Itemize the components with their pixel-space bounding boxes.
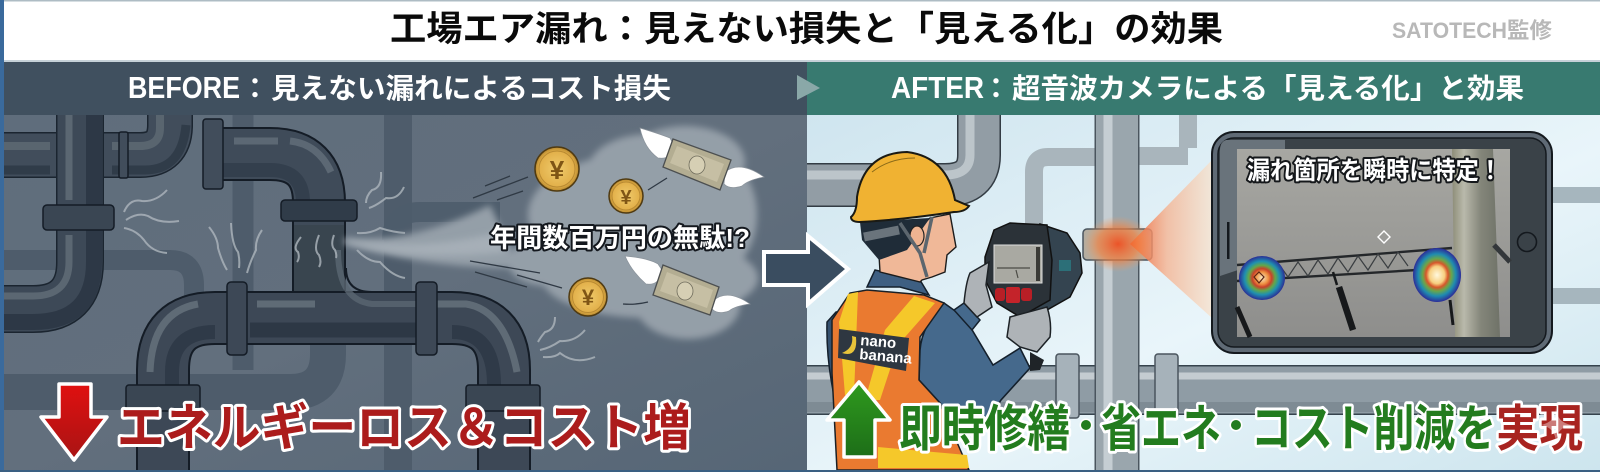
camera grip: [1030, 352, 1044, 371]
red down arrow: [41, 384, 107, 460]
helmet: [851, 152, 969, 222]
callout: annual waste: 年間数百万円の無駄!?: [490, 223, 750, 253]
torso and sleeve: [919, 303, 1030, 418]
title bar: [4, 2, 1600, 60]
back sliver: [827, 310, 845, 400]
motion lines: [470, 176, 667, 304]
tablet display: [1212, 132, 1552, 353]
benefit headline: [899, 401, 1583, 457]
header: after: AFTER: [891, 70, 984, 105]
coin 2: ¥: [620, 187, 632, 209]
benefit headline: 省エネ: [1101, 401, 1221, 457]
right side pipes: [1551, 195, 1600, 296]
left curved pipe: [4, 115, 94, 322]
gloved hands: [964, 262, 1051, 352]
green up arrow: [827, 382, 890, 457]
header: before: 見えない漏れによるコスト損失: [271, 73, 671, 104]
thin vertical pipe: [1130, 115, 1188, 156]
supervisor credit: SATOTECH: [1392, 18, 1507, 43]
coin 3: [569, 278, 607, 316]
central vertical pipe: [1108, 115, 1117, 472]
header: after: [807, 62, 1600, 115]
flying banknote 1: [640, 128, 764, 190]
background pipes: [4, 115, 500, 470]
hair: [860, 218, 930, 260]
leak wisps: [124, 172, 595, 360]
main flanges: [126, 282, 540, 411]
ultrasonic beam: [1130, 160, 1212, 318]
vest stripes: [839, 292, 969, 468]
benefit headline: コスト削減を: [1251, 401, 1496, 457]
frame pipe: [1034, 157, 1100, 228]
upper flanges: [43, 132, 128, 230]
worker figure: [827, 152, 1030, 470]
header: after: 超音波カメラによる「見える化」と効果: [1012, 73, 1524, 104]
coin 3: ¥: [582, 285, 595, 310]
upper horizontal pipe: [4, 115, 186, 170]
benefit headline: 実現: [1496, 401, 1583, 457]
cloud jet core: [345, 232, 505, 255]
benefit headline: 即時修繕: [899, 401, 1070, 457]
coin 1: [535, 147, 579, 191]
face and neck: [879, 214, 956, 282]
supervisor credit: 監修: [1507, 18, 1552, 43]
panel: before pipes: [4, 115, 540, 472]
name badge: banana: [859, 346, 913, 368]
header: before: ：: [241, 73, 269, 104]
head band: [864, 230, 899, 237]
coin 1: ¥: [550, 155, 565, 185]
main title: 工場エア漏れ：見えない損失と「見える化」の効果: [390, 10, 1223, 49]
coin 2: [609, 179, 643, 213]
header: before: [4, 62, 807, 115]
header: before: BEFORE: [128, 70, 240, 105]
elbow flanges: [203, 119, 357, 221]
panel: after background: [807, 115, 1600, 470]
thermal camera: [985, 223, 1082, 317]
flying banknote 2: [625, 256, 750, 315]
ear: [910, 226, 924, 246]
pipe flanges: [1056, 229, 1178, 418]
header transition arrow: [797, 75, 820, 100]
tablet caption: 漏れ箇所を瞬時に特定！: [1247, 157, 1502, 185]
panel: before background: [4, 115, 807, 470]
sparkle mark: [1540, 408, 1572, 442]
big arrow: before to after: [764, 236, 848, 304]
panel: after pipes: [807, 115, 1600, 472]
elbow pipe: [222, 141, 331, 300]
loss headline: エネルギーロス＆コスト増: [117, 400, 691, 456]
collar: [867, 270, 929, 295]
header: after: ：: [982, 73, 1010, 104]
elbow pipe: [807, 115, 979, 185]
name badge: [838, 329, 913, 371]
forearm sleeve: [954, 303, 980, 330]
leak glow: [1084, 216, 1152, 272]
tablet screen: [1237, 149, 1510, 337]
main horizontal pipe: [807, 376, 1600, 407]
safety vest: [832, 290, 969, 470]
helmet straps: [900, 217, 932, 277]
main T pipe: [150, 250, 517, 472]
name badge: nano: [860, 332, 897, 352]
air leak cloud: [345, 126, 758, 339]
